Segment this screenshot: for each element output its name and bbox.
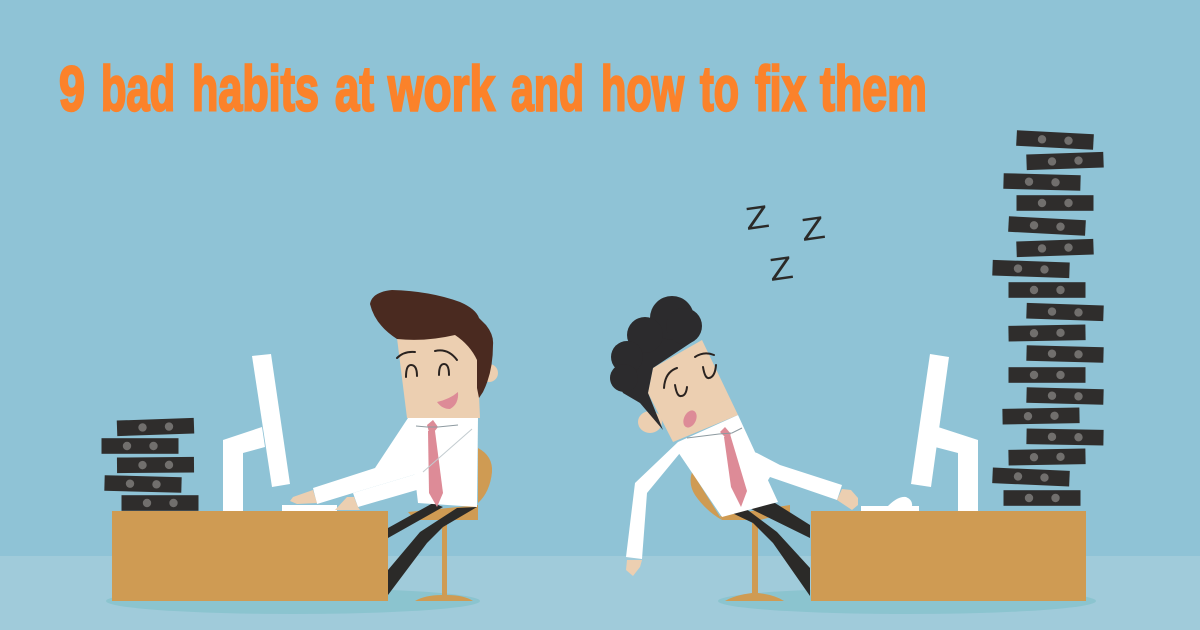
title: fix [755,54,806,124]
left keyboard [282,505,337,511]
title: to [700,54,739,124]
floor [0,556,1200,630]
right man torso and arms [626,415,842,559]
title: 9 [59,54,85,124]
left binder stack [102,418,198,511]
title: bad [101,54,175,124]
right man tie [720,427,747,507]
title: them [820,54,927,124]
left monitor [223,354,290,511]
right man chair [691,472,790,601]
title: habits [192,54,319,124]
title: how [601,54,685,124]
left man hands [290,490,360,510]
sleeping Z letters: Z [799,210,827,248]
right monitor [911,354,978,511]
title: work [387,54,496,124]
right desk [811,511,1086,601]
left man legs [388,503,477,595]
left man torso and arms [313,417,478,507]
sleeping Z letters [743,199,827,288]
right man head [610,296,738,442]
floor shadow right [718,588,1096,614]
right keyboard and mouse [861,497,919,511]
left man head [370,290,498,418]
title [59,54,927,124]
title: at [335,54,374,124]
left man tie [427,420,443,507]
sleeping Z letters: Z [767,250,795,288]
right binder stack [992,130,1104,506]
floor shadow left [106,588,480,614]
sleeping Z letters: Z [743,199,771,237]
title: and [511,54,584,124]
left desk [112,511,388,601]
right man hands [626,489,858,576]
right man legs [730,503,810,596]
left man chair [408,448,492,601]
